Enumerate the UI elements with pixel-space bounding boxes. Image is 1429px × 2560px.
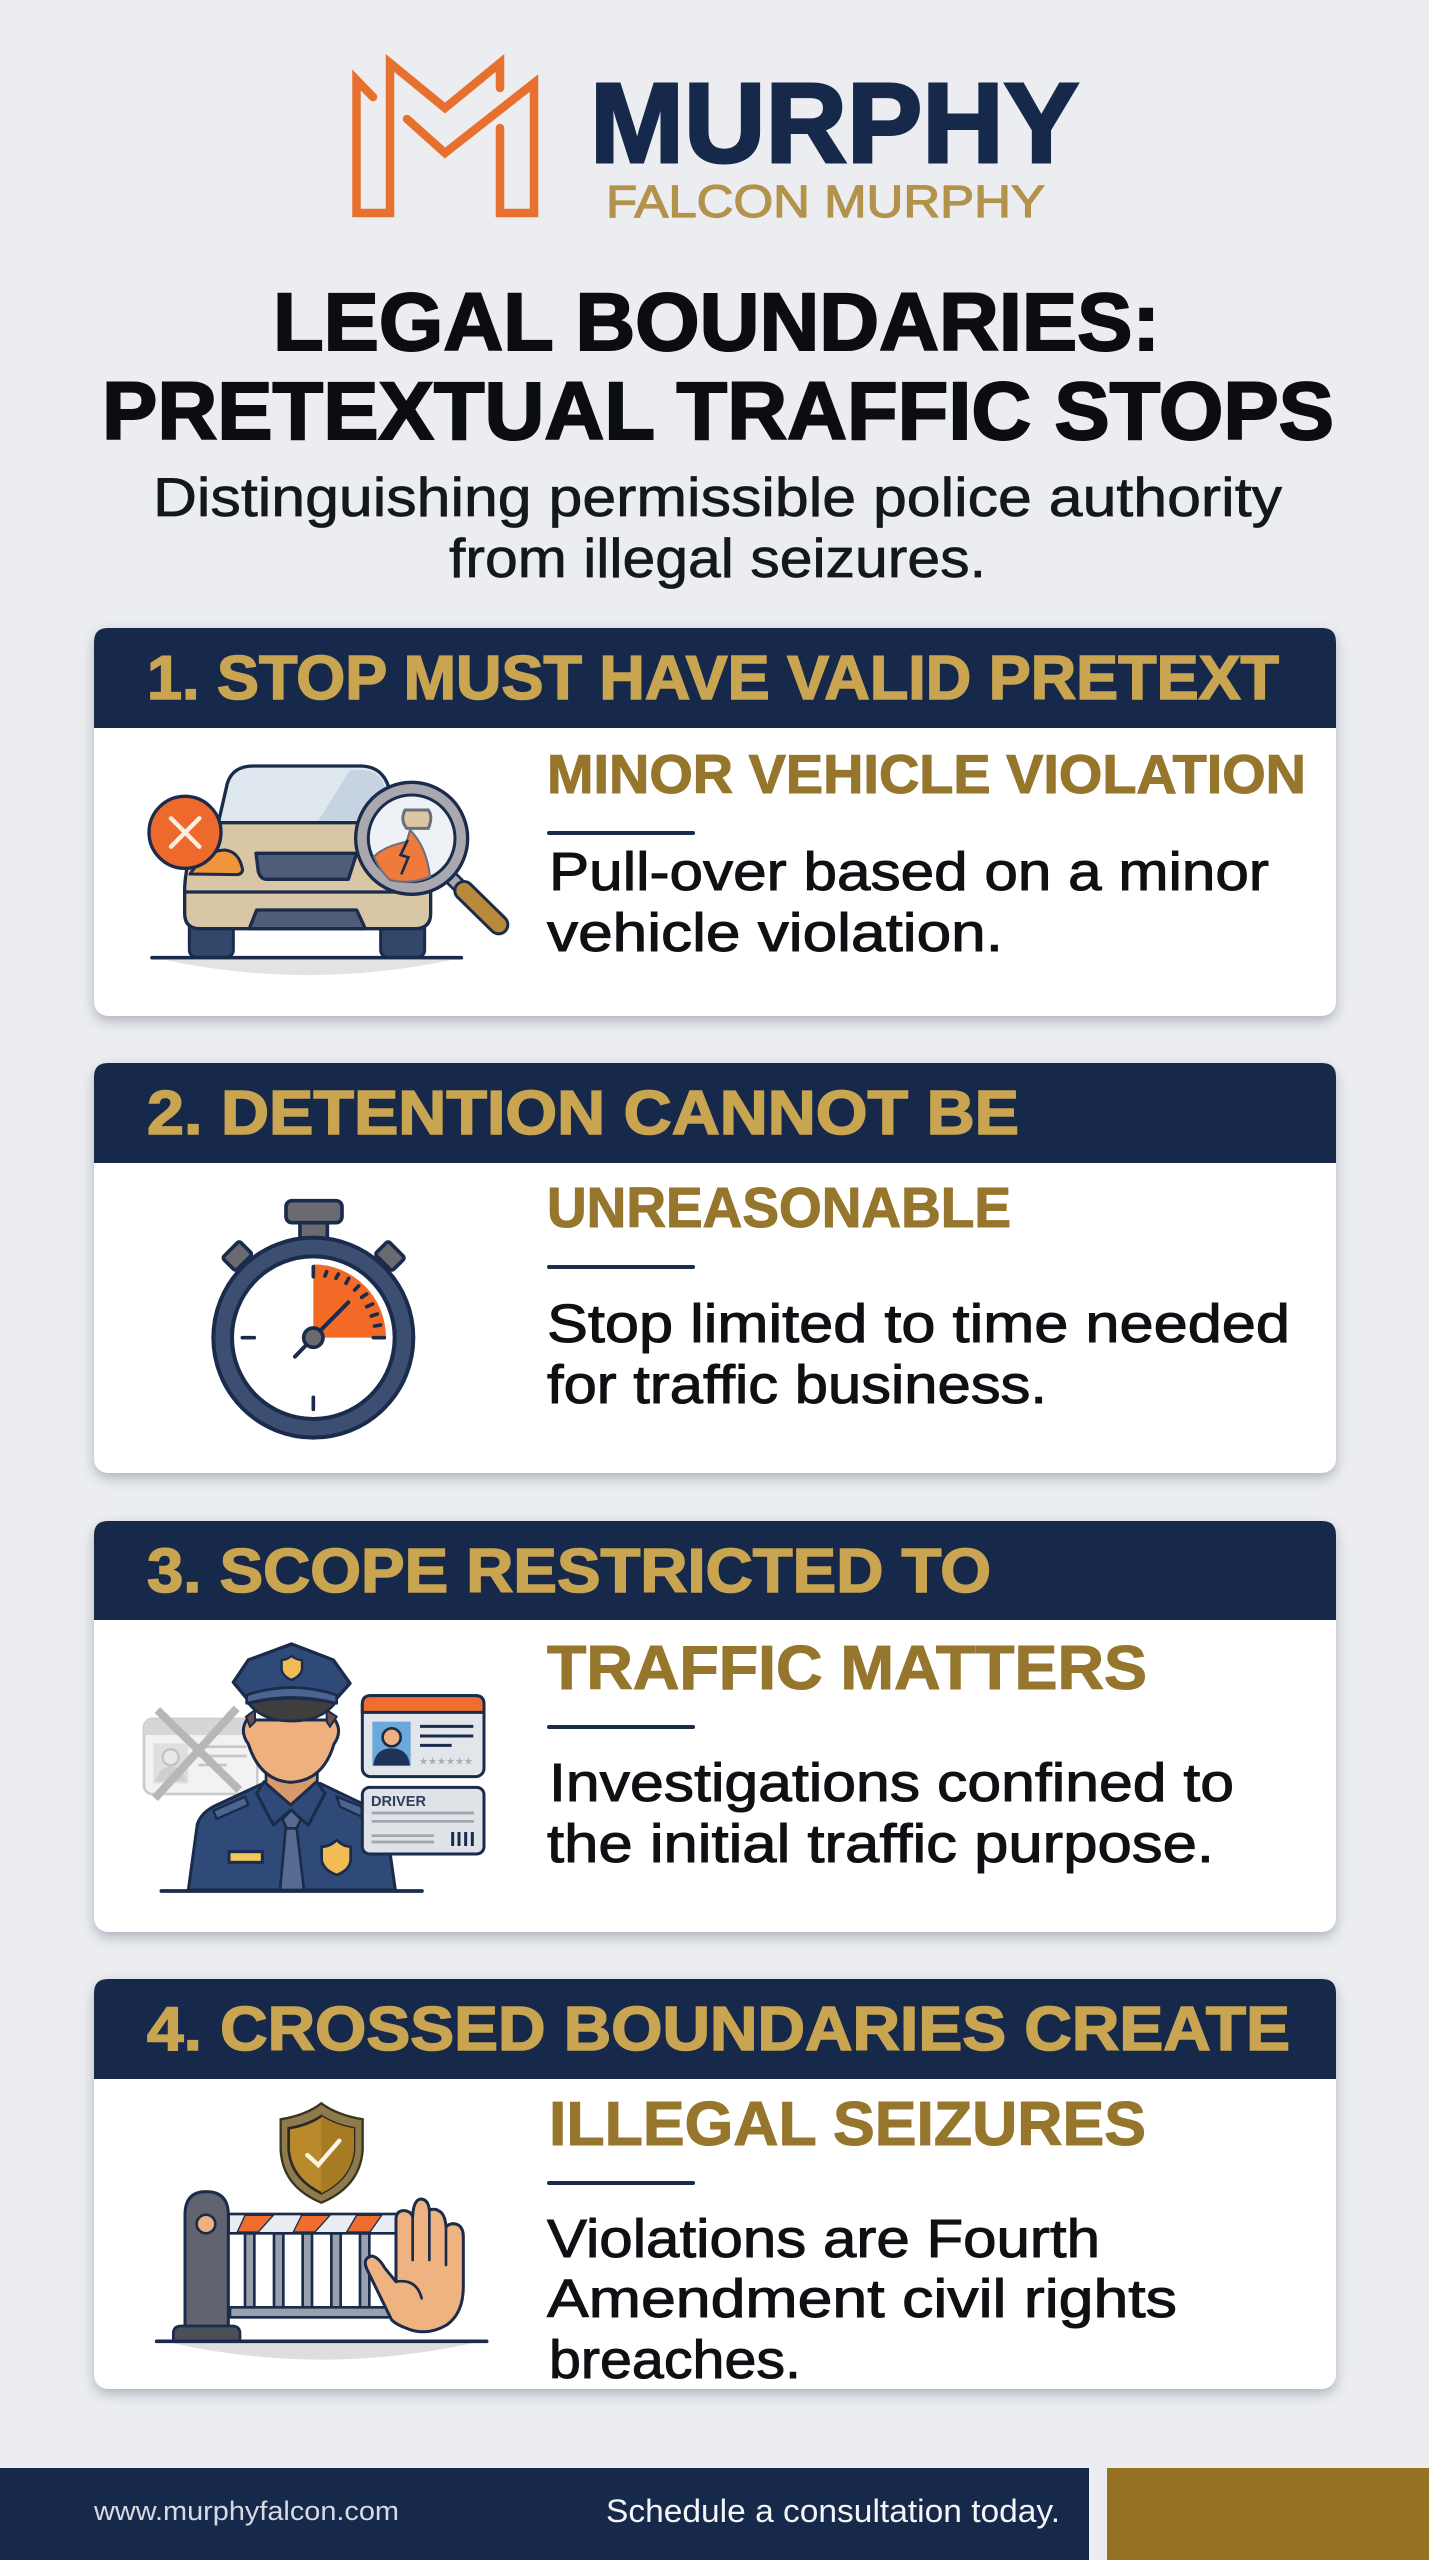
title: LEGAL BOUNDARIES: xyxy=(273,277,1160,368)
description: Violations are Fourth xyxy=(547,2209,1100,2269)
description xyxy=(547,1294,1290,1415)
sub-heading: MINOR VEHICLE VIOLATION xyxy=(547,743,1306,805)
description xyxy=(547,1753,1234,1874)
header text: 1. STOP MUST HAVE VALID PRETEXT xyxy=(147,644,1279,713)
panel 4: illegal seizures xyxy=(94,1979,1336,2390)
icon: stopwatch xyxy=(222,1201,405,1428)
panel 3: scope xyxy=(94,1521,1336,1932)
header text: 2. DETENTION CANNOT BE xyxy=(147,1079,1019,1148)
header bar xyxy=(94,628,1336,728)
description xyxy=(547,2209,1177,2390)
header bar xyxy=(94,1979,1336,2079)
description: for traffic business. xyxy=(547,1355,1047,1415)
description: Pull-over based on a minor xyxy=(549,842,1269,902)
description: Amendment civil rights xyxy=(547,2269,1177,2329)
subtitle xyxy=(153,466,1283,589)
footer navy bar xyxy=(0,2468,1089,2560)
subtitle: Distinguishing permissible police authority xyxy=(153,466,1283,528)
footer xyxy=(0,2468,1429,2560)
logo wordmark: MURPHY xyxy=(590,60,1079,186)
logo sub-wordmark: FALCON MURPHY xyxy=(606,176,1045,227)
subtitle: from illegal seizures. xyxy=(449,527,986,589)
card background xyxy=(94,628,1336,1016)
title xyxy=(102,277,1334,457)
description: the initial traffic purpose. xyxy=(547,1814,1214,1874)
sub-heading: UNREASONABLE xyxy=(547,1176,1011,1240)
logo mark: orange M xyxy=(356,63,534,213)
icon: barrier, shield and stop hand xyxy=(157,2103,487,2360)
header text: 3. SCOPE RESTRICTED TO xyxy=(147,1537,991,1606)
sub-heading: TRAFFIC MATTERS xyxy=(547,1634,1147,1703)
icon: police officer with IDs xyxy=(144,1644,484,1891)
footer gold block xyxy=(1107,2468,1429,2560)
card background xyxy=(94,1063,1336,1473)
title: PRETEXTUAL TRAFFIC STOPS xyxy=(102,366,1334,457)
call to action: Schedule a consultation today. xyxy=(606,2493,1060,2529)
description: vehicle violation. xyxy=(547,903,1003,963)
header bar xyxy=(94,1521,1336,1620)
icon: police officer with IDs: DRIVER xyxy=(371,1794,426,1810)
header bar xyxy=(94,1063,1336,1163)
icon: police officer with IDs: ★★★★★★ xyxy=(419,1756,473,1767)
card background xyxy=(94,1521,1336,1932)
description: breaches. xyxy=(549,2330,801,2390)
panel 2: detention xyxy=(94,1063,1336,1473)
website: www.murphyfalcon.com xyxy=(93,2496,399,2526)
description xyxy=(547,842,1269,963)
description: Stop limited to time needed xyxy=(547,1294,1290,1354)
description: Investigations confined to xyxy=(549,1753,1234,1813)
logo xyxy=(356,60,1079,227)
sub-heading: ILLEGAL SEIZURES xyxy=(549,2090,1146,2159)
header text: 4. CROSSED BOUNDARIES CREATE xyxy=(147,1995,1290,2064)
panel 1: valid pretext xyxy=(94,628,1336,1016)
icon: car with magnifier and x badge xyxy=(149,766,499,975)
card background xyxy=(94,1979,1336,2389)
